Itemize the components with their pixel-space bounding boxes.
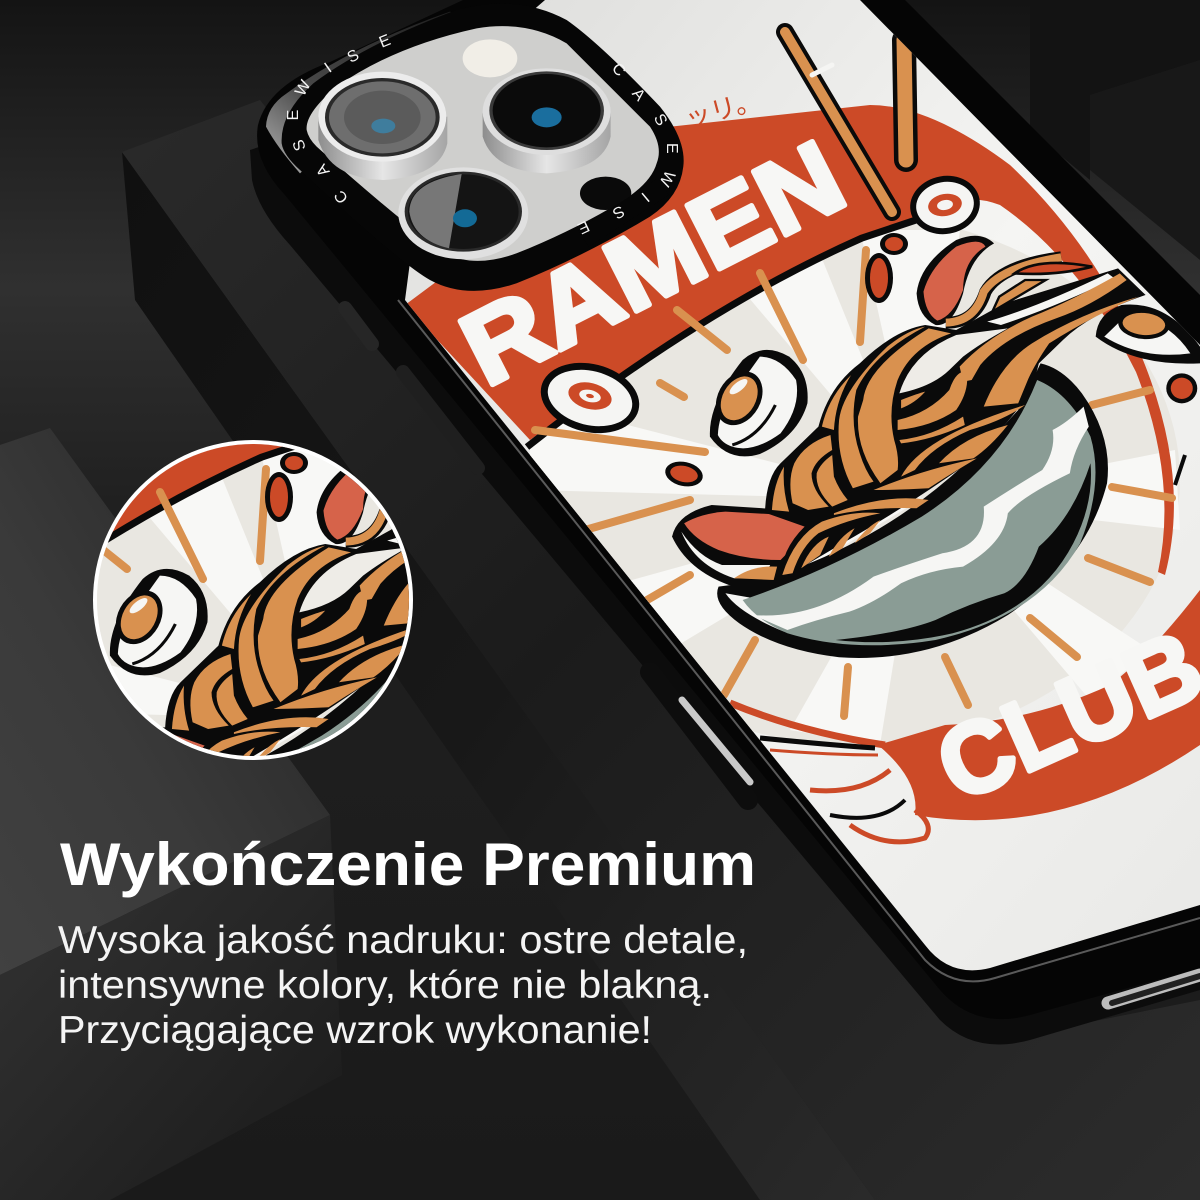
lens: bottom <box>398 167 528 259</box>
black glossy frame <box>257 0 1200 1019</box>
description: Przyciągające wzrok wykonanie! <box>58 1009 652 1052</box>
brand ring text: A <box>628 85 648 105</box>
brand ring text: S <box>609 202 627 222</box>
sensor hole <box>580 177 631 210</box>
brand ring text: I <box>638 189 652 205</box>
black camera ring <box>282 4 684 291</box>
block: upper right <box>1030 0 1200 260</box>
brand ring text: S <box>650 111 670 129</box>
wing lines near club banner <box>760 738 928 842</box>
camera island <box>266 4 684 291</box>
heading: Wykończenie Premium <box>60 831 756 898</box>
lens: left <box>318 72 447 180</box>
brand ring text: E <box>663 143 680 154</box>
description: intensywne kolory, które nie blakną. <box>58 964 712 1007</box>
brand ring text: W <box>655 168 678 190</box>
RAMEN lettering: RAMEN <box>444 119 862 408</box>
brand ring text: I <box>322 60 335 77</box>
description: Wysoka jakość nadruku: ostre detale, <box>58 919 748 962</box>
frame port <box>1108 975 1200 1003</box>
brand ring text: C <box>608 60 629 80</box>
clear strip outside ring <box>266 12 463 173</box>
phone side wall <box>250 100 1200 1044</box>
Japanese label: ッリ。 <box>682 85 764 134</box>
brand ring text: S <box>345 47 362 67</box>
block: lower left stone <box>0 428 342 1200</box>
brand ring text <box>285 32 680 237</box>
lens: right <box>483 68 611 173</box>
description <box>58 919 748 1052</box>
brand ring text: E <box>377 32 393 52</box>
brand ring text: W <box>292 77 315 99</box>
chopsticks <box>785 32 906 212</box>
flash <box>463 39 517 77</box>
brand ring text: E <box>285 110 302 120</box>
ramen artwork <box>405 32 1200 842</box>
brand ring text: C <box>331 187 352 206</box>
phone with ramen case <box>250 0 1200 1044</box>
brand ring text: S <box>290 137 310 153</box>
magnified detail circle <box>93 440 413 760</box>
side buttons <box>345 308 750 800</box>
case surface <box>405 0 1200 970</box>
brand ring text: E <box>575 217 592 237</box>
brand ring text: A <box>313 160 333 179</box>
